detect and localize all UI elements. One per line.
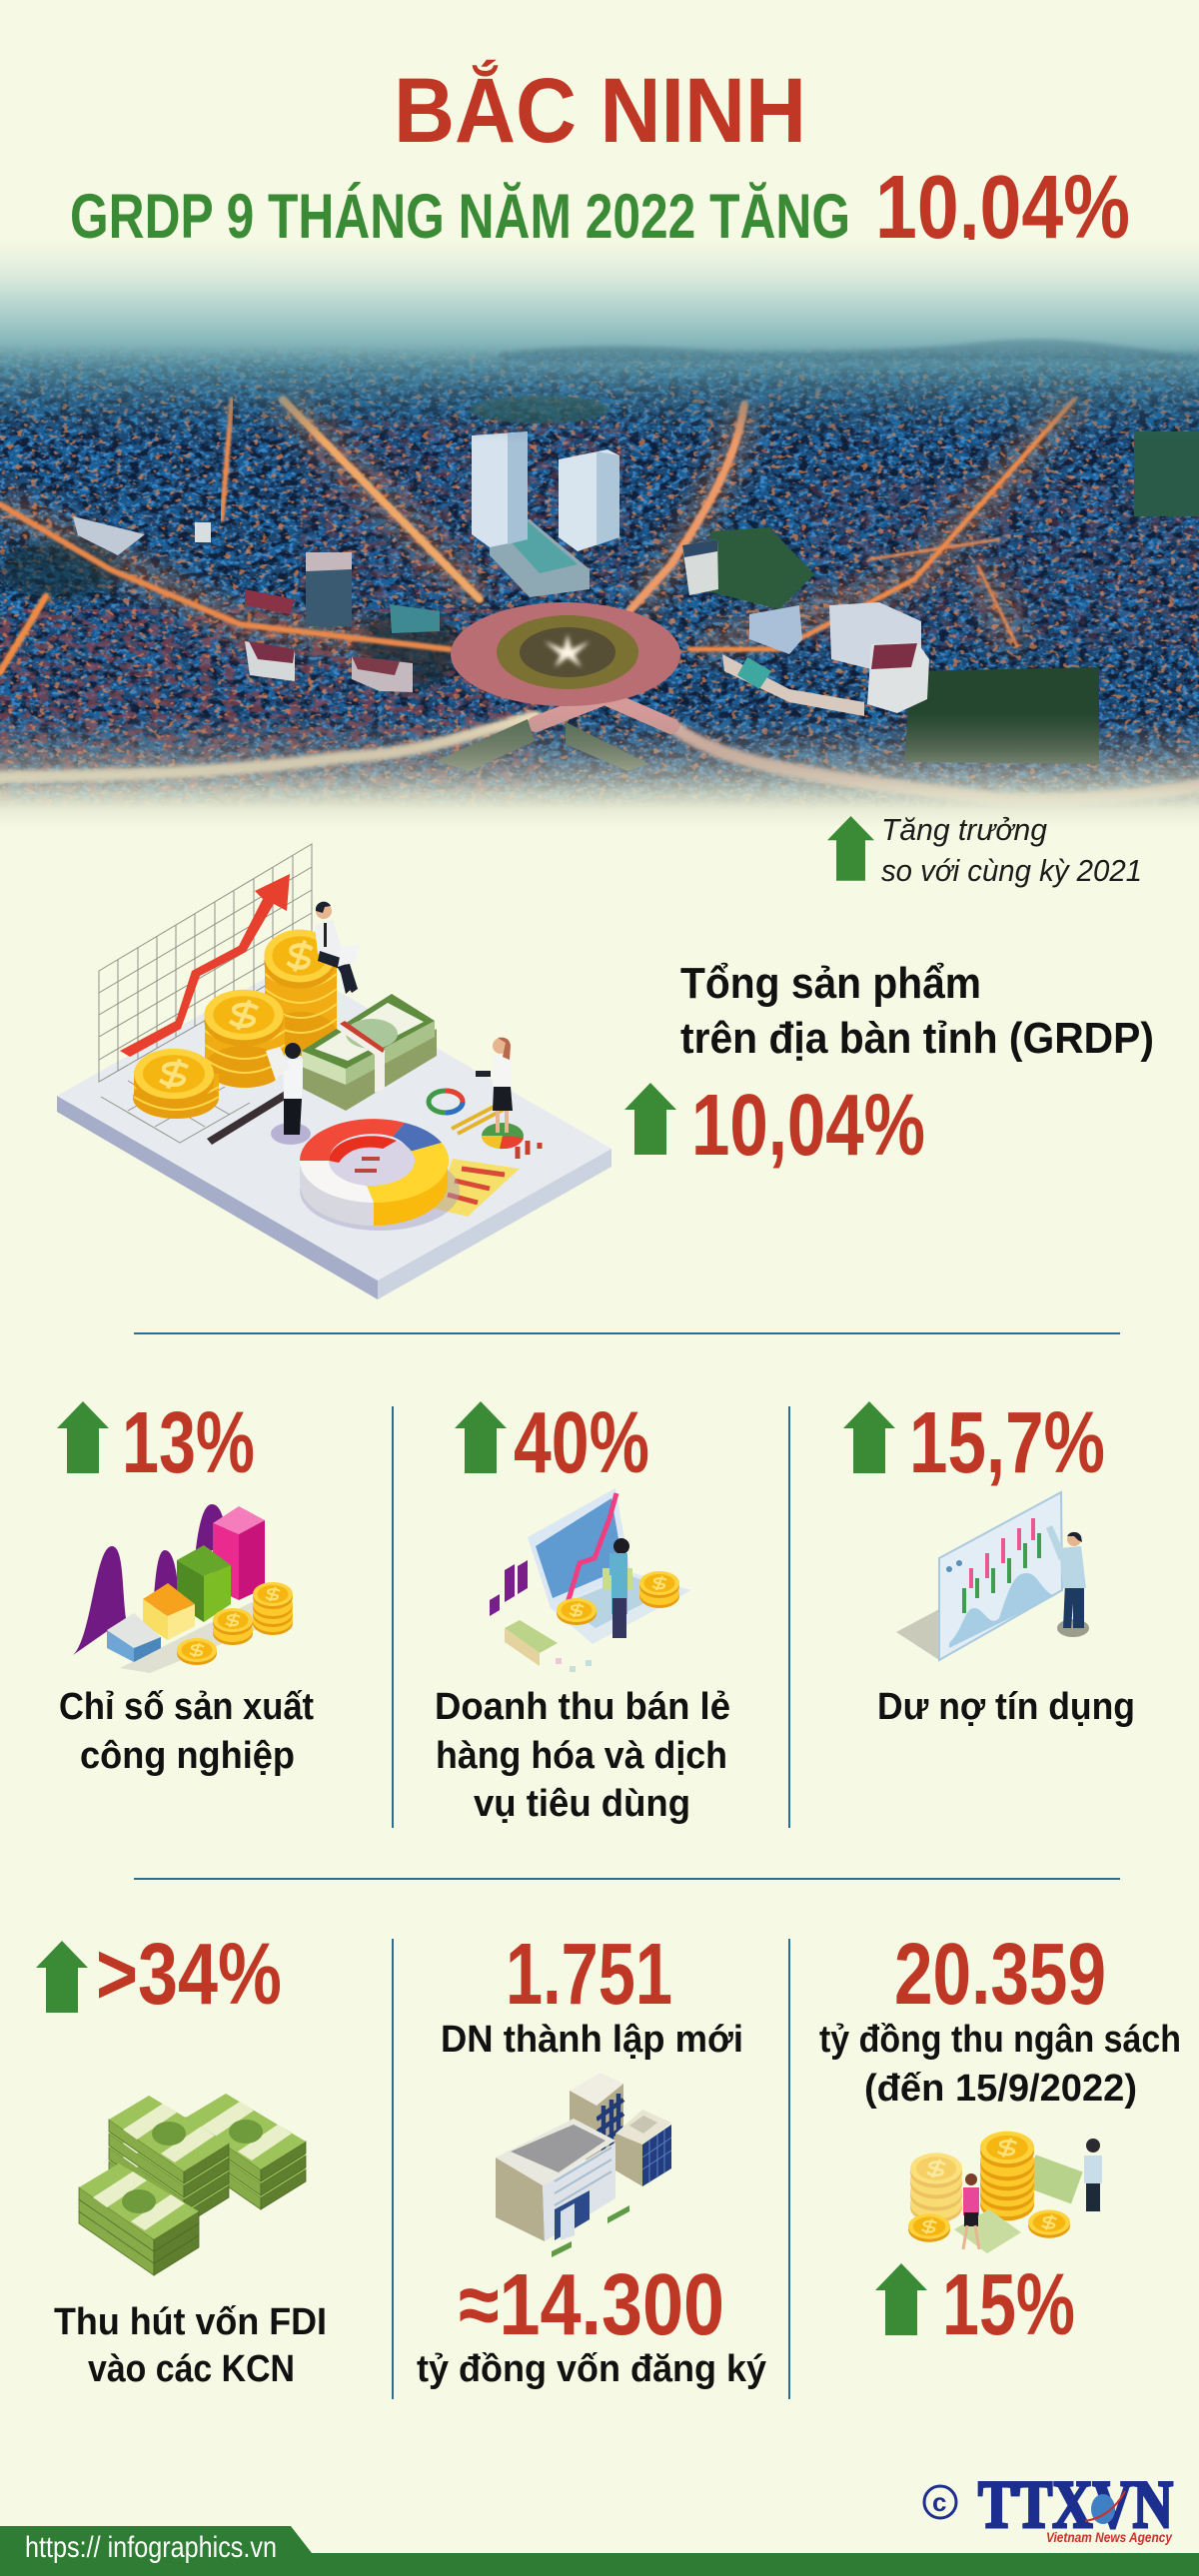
label: vào các KCN <box>88 2348 295 2390</box>
label: vụ tiêu dùng <box>474 1783 690 1825</box>
platform <box>57 964 611 1299</box>
city aerial photo <box>0 240 1199 839</box>
coin stack: middle <box>204 990 285 1088</box>
icon: legend arrow <box>827 816 874 881</box>
panel: budget revenue <box>819 1926 1181 2353</box>
value: registered capital: ≈14.300 <box>459 2256 724 2353</box>
headline figure: 10,04% <box>875 158 1130 258</box>
legend text: so với cùng kỳ 2021 <box>881 853 1142 888</box>
distant hills <box>500 340 1199 362</box>
subheading: GRDP growth: GRDP 9 THÁNG NĂM 2022 TĂNG <box>70 182 850 252</box>
value: 40% <box>514 1394 649 1491</box>
illustration: isometric economy scene <box>57 844 611 1299</box>
woman standing on a pie chart <box>476 1038 524 1149</box>
website URL: https:// infographics.vn <box>25 2531 277 2564</box>
icon: stock chart board and man <box>896 1492 1089 1660</box>
legend: growth compared with 2021 <box>827 812 1142 888</box>
label: Thu hút vốn FDI <box>54 2301 327 2343</box>
label: new enterprises: DN thành lập mới <box>441 2019 743 2061</box>
label <box>54 2301 327 2390</box>
central complex and towers <box>490 519 590 597</box>
icon: up arrow <box>875 2263 927 2335</box>
GRDP label: Tổng sản phẩm <box>680 959 981 1008</box>
plaza hedges <box>436 719 535 771</box>
panel: FDI <box>36 1926 327 2390</box>
value: 13% <box>122 1394 255 1491</box>
copyright mark <box>924 2486 956 2518</box>
icon: up arrow <box>624 1083 676 1155</box>
icon: up arrow <box>843 1401 895 1473</box>
GRDP label: trên địa bàn tỉnh (GRDP) <box>680 1014 1154 1063</box>
label: registered capital: tỷ đồng vốn đăng ký <box>417 2348 766 2390</box>
icon: up arrow <box>57 1401 109 1473</box>
label: Chỉ số sản xuất <box>59 1686 314 1728</box>
icon: coins, money and people <box>908 2132 1102 2253</box>
label: budget revenue: (đến 15/9/2022) <box>864 2068 1137 2110</box>
icon: stacks of banknotes <box>79 2094 306 2275</box>
3D donut chart <box>300 1119 460 1231</box>
city texture and landmarks <box>0 345 1199 819</box>
money bundles <box>302 994 437 1111</box>
coin stack: tall <box>264 930 337 1056</box>
value: new enterprises: 1.751 <box>506 1926 672 2023</box>
icon: laptop with growth arrow <box>490 1488 691 1672</box>
icon: colourful blocks and coins <box>73 1504 293 1673</box>
panel: industrial production index <box>57 1394 314 1777</box>
icon: up arrow <box>455 1401 507 1473</box>
value: >34% <box>96 1926 282 2023</box>
legend text: Tăng trưởng <box>881 812 1047 847</box>
red growth arrow <box>120 874 290 1057</box>
GRDP statistic <box>624 959 1154 1174</box>
label <box>59 1686 314 1777</box>
legend text <box>881 812 1142 888</box>
label: công nghiệp <box>80 1735 295 1777</box>
footer band <box>0 2526 1199 2576</box>
heading: Bắc Ninh: BẮC NINH <box>394 59 806 162</box>
label <box>435 1686 730 1825</box>
title <box>70 59 1130 258</box>
roundabout <box>451 602 680 706</box>
right buildings <box>682 539 718 595</box>
agency name: Vietnam News Agency <box>1046 2529 1173 2545</box>
copyright mark: c <box>932 2487 946 2517</box>
icon: up arrow <box>36 1941 88 2013</box>
value: budget revenue: 20.359 <box>894 1926 1106 2023</box>
panel: credit balance <box>843 1394 1135 1728</box>
panel: new enterprises <box>417 1926 766 2390</box>
panel: retail revenue <box>435 1394 730 1825</box>
TTXVN logo <box>924 2466 1173 2545</box>
value: growth: 15% <box>942 2256 1075 2353</box>
label: Doanh thu bán lẻ <box>435 1686 730 1728</box>
small charts on the platform <box>429 1091 540 1217</box>
pencil and man <box>207 1043 311 1145</box>
coin stack: front <box>133 1049 219 1119</box>
GRDP value: 10,04% <box>691 1077 925 1174</box>
GRDP label <box>680 959 1154 1063</box>
label: hàng hóa và dịch <box>436 1735 727 1777</box>
globe mark <box>1085 2491 1125 2524</box>
icon: office buildings <box>496 2073 671 2257</box>
man on coin with laptop <box>315 902 360 994</box>
value: 15,7% <box>909 1394 1105 1491</box>
label: budget revenue <box>819 2019 1181 2110</box>
left buildings <box>306 569 352 626</box>
label: Dư nợ tín dụng <box>877 1686 1135 1728</box>
